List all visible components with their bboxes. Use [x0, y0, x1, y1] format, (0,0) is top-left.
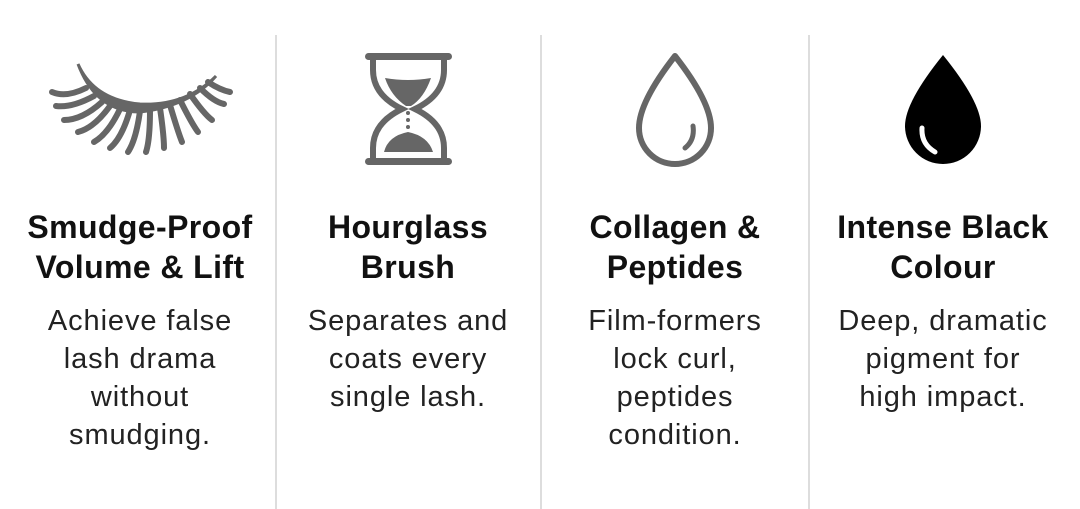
heading: Intense Black — [837, 209, 1049, 245]
text: without — [91, 381, 189, 413]
text: Deep, dramatic — [838, 305, 1048, 337]
heading — [328, 209, 488, 285]
heading: Collagen & — [589, 209, 761, 245]
icon: hourglass — [365, 53, 452, 165]
text — [48, 305, 232, 451]
heading: Colour — [890, 249, 996, 285]
icon: black drop — [905, 55, 981, 164]
text — [588, 305, 762, 451]
heading — [837, 209, 1049, 285]
panel: intense black — [837, 55, 1049, 413]
text — [308, 305, 508, 413]
panel: hourglass — [308, 53, 508, 413]
panel: collagen — [588, 53, 762, 451]
text: condition. — [608, 419, 742, 451]
heading: Brush — [361, 249, 455, 285]
heading — [589, 209, 761, 285]
heading: Peptides — [607, 249, 743, 285]
panel: smudge-proof — [27, 63, 253, 451]
text: Separates and — [308, 305, 508, 337]
icon: eyelash — [49, 63, 233, 155]
text: high impact. — [859, 381, 1027, 413]
text: Film-formers — [588, 305, 762, 337]
text: peptides — [617, 381, 733, 413]
heading: Smudge-Proof — [27, 209, 253, 245]
text: smudging. — [69, 419, 211, 451]
heading: Hourglass — [328, 209, 488, 245]
text: coats every — [329, 343, 487, 375]
text: single lash. — [330, 381, 486, 413]
heading: Volume & Lift — [35, 249, 245, 285]
text: Achieve false — [48, 305, 232, 337]
heading — [27, 209, 253, 285]
text — [838, 305, 1048, 413]
text: lash drama — [64, 343, 216, 375]
text: lock curl, — [613, 343, 737, 375]
text: pigment for — [866, 343, 1020, 375]
icon: water drop outline — [636, 53, 714, 167]
